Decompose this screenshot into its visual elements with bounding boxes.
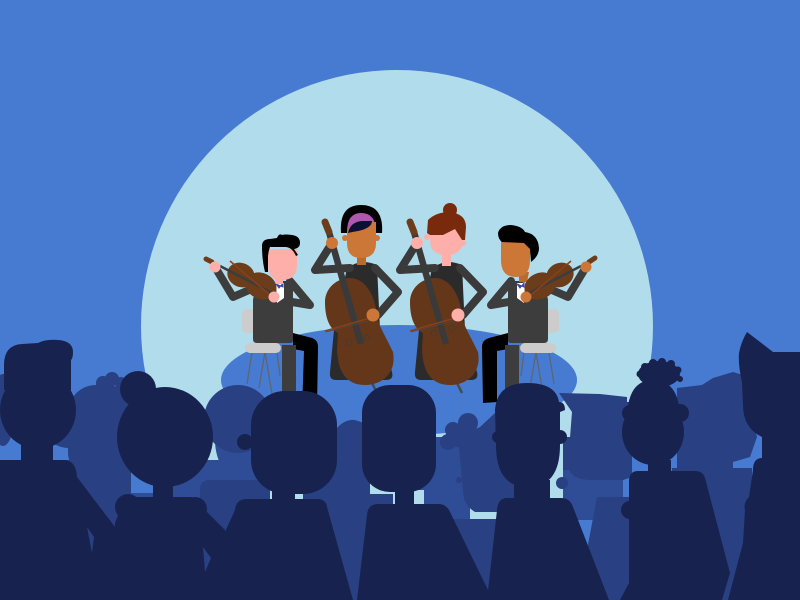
audience: middle row silhouettes — [0, 372, 757, 600]
audience: front person 7 — [728, 332, 800, 600]
audience: front person 1 — [0, 340, 115, 600]
audience: front person 4 — [357, 385, 492, 600]
audience: front person 2 — [110, 371, 230, 600]
musician: right violinist — [482, 225, 595, 410]
audience: front person 3 — [197, 391, 353, 600]
musician: first cellist — [315, 205, 398, 393]
audience: front person 6 — [620, 358, 730, 600]
musician: left violinist — [206, 234, 318, 410]
spotlight circle — [141, 70, 653, 582]
audience: front person 5 — [487, 383, 609, 600]
audience: back row shading — [131, 398, 623, 600]
stage — [221, 325, 577, 435]
musician: second cellist — [400, 203, 483, 393]
